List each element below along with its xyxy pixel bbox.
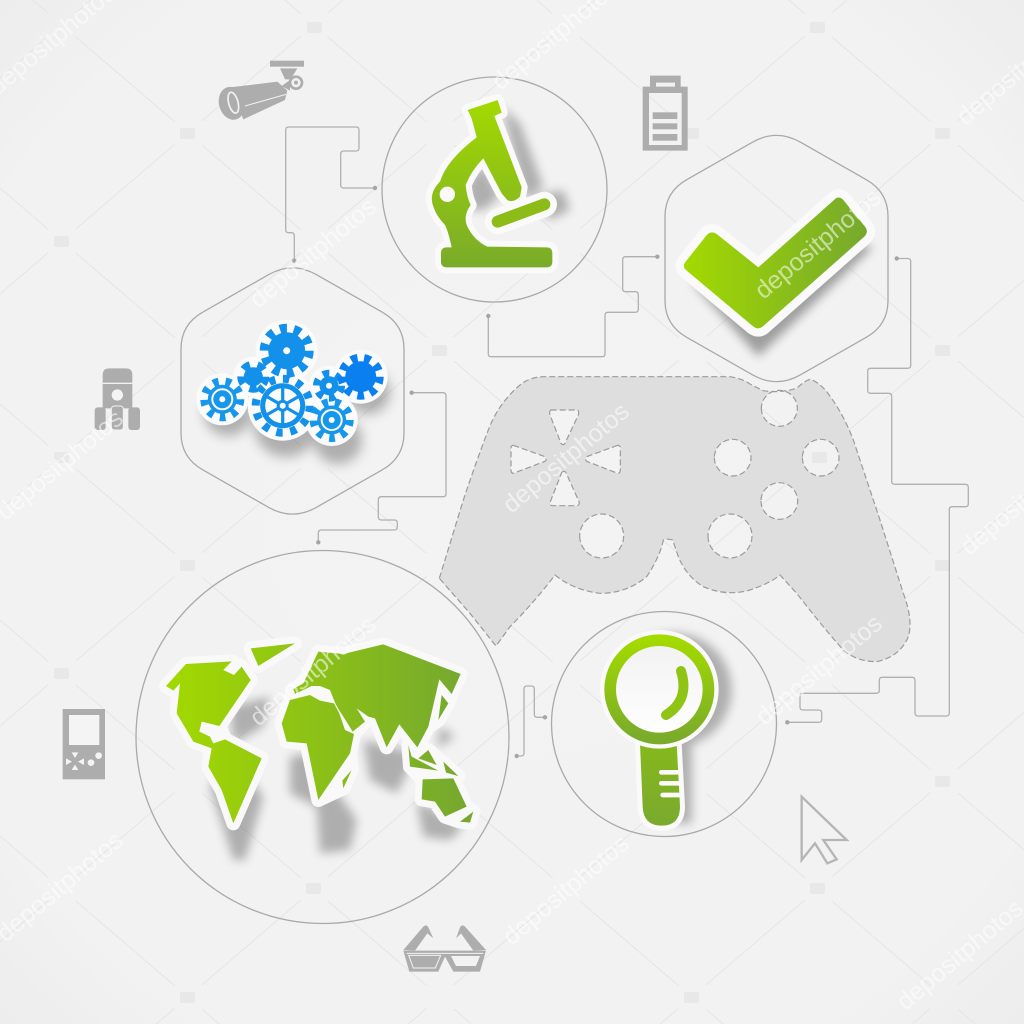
icon: mouse cursor arrow <box>802 797 847 863</box>
magnifier handle grip notches <box>661 772 680 795</box>
connector: microscope to gears <box>286 127 377 263</box>
sticker: gears <box>196 320 390 464</box>
watermark text: depositphotos <box>244 192 382 314</box>
sticker: world map <box>166 643 473 860</box>
microscope stage <box>498 204 544 222</box>
panel: world map circle <box>136 550 509 924</box>
panel: gears hexagon <box>181 268 404 514</box>
magnifier ring <box>600 630 719 749</box>
connector: world map to magnifier <box>514 686 547 758</box>
icon: security camera <box>215 61 304 123</box>
gear: bottom right ring <box>314 402 350 438</box>
watermark text: depositphotos <box>750 609 888 731</box>
sticker: microscope <box>432 100 570 267</box>
world map white sticker border <box>166 643 473 823</box>
watermark text: depositphotos <box>749 183 887 305</box>
watermark text: depositphotos <box>497 397 635 519</box>
watermark text: depositphotos <box>244 610 382 732</box>
magnifier shadow <box>618 633 732 823</box>
panel: check mark hexagon <box>665 135 888 382</box>
icon: gas mask <box>95 368 140 430</box>
panel: magnifier circle <box>552 612 776 836</box>
gear: small right <box>316 373 342 398</box>
world map landmasses <box>166 643 473 823</box>
connector: gears to world map <box>316 390 446 544</box>
connector: microscope to check mark <box>486 255 660 357</box>
check mark shadow <box>690 243 873 357</box>
panel: microscope circle <box>382 77 607 302</box>
gear: far right solid <box>342 358 380 396</box>
sticker: check mark <box>684 197 873 357</box>
magnifier handle <box>640 743 680 826</box>
world map shadow <box>210 697 463 860</box>
icon: 3D glasses <box>403 925 486 972</box>
gear: left ring <box>204 381 240 417</box>
microscope body <box>432 100 552 267</box>
microscope shadow <box>467 107 570 220</box>
check mark shape <box>684 197 867 328</box>
gear: small left star <box>241 364 266 389</box>
microscope focus knob <box>440 187 455 202</box>
gears white backing <box>196 320 388 446</box>
game controller silhouette <box>439 377 910 662</box>
icon: handheld console <box>63 709 105 779</box>
gear: top <box>264 328 309 373</box>
gear: centre spoked <box>256 379 310 433</box>
sticker: magnifying glass <box>600 630 732 826</box>
watermark text: depositphotos <box>497 829 635 951</box>
gears shadow <box>204 370 390 464</box>
connector: check mark to magnifier <box>785 256 968 724</box>
icon: battery <box>643 76 688 151</box>
magnifier highlight <box>666 671 683 715</box>
